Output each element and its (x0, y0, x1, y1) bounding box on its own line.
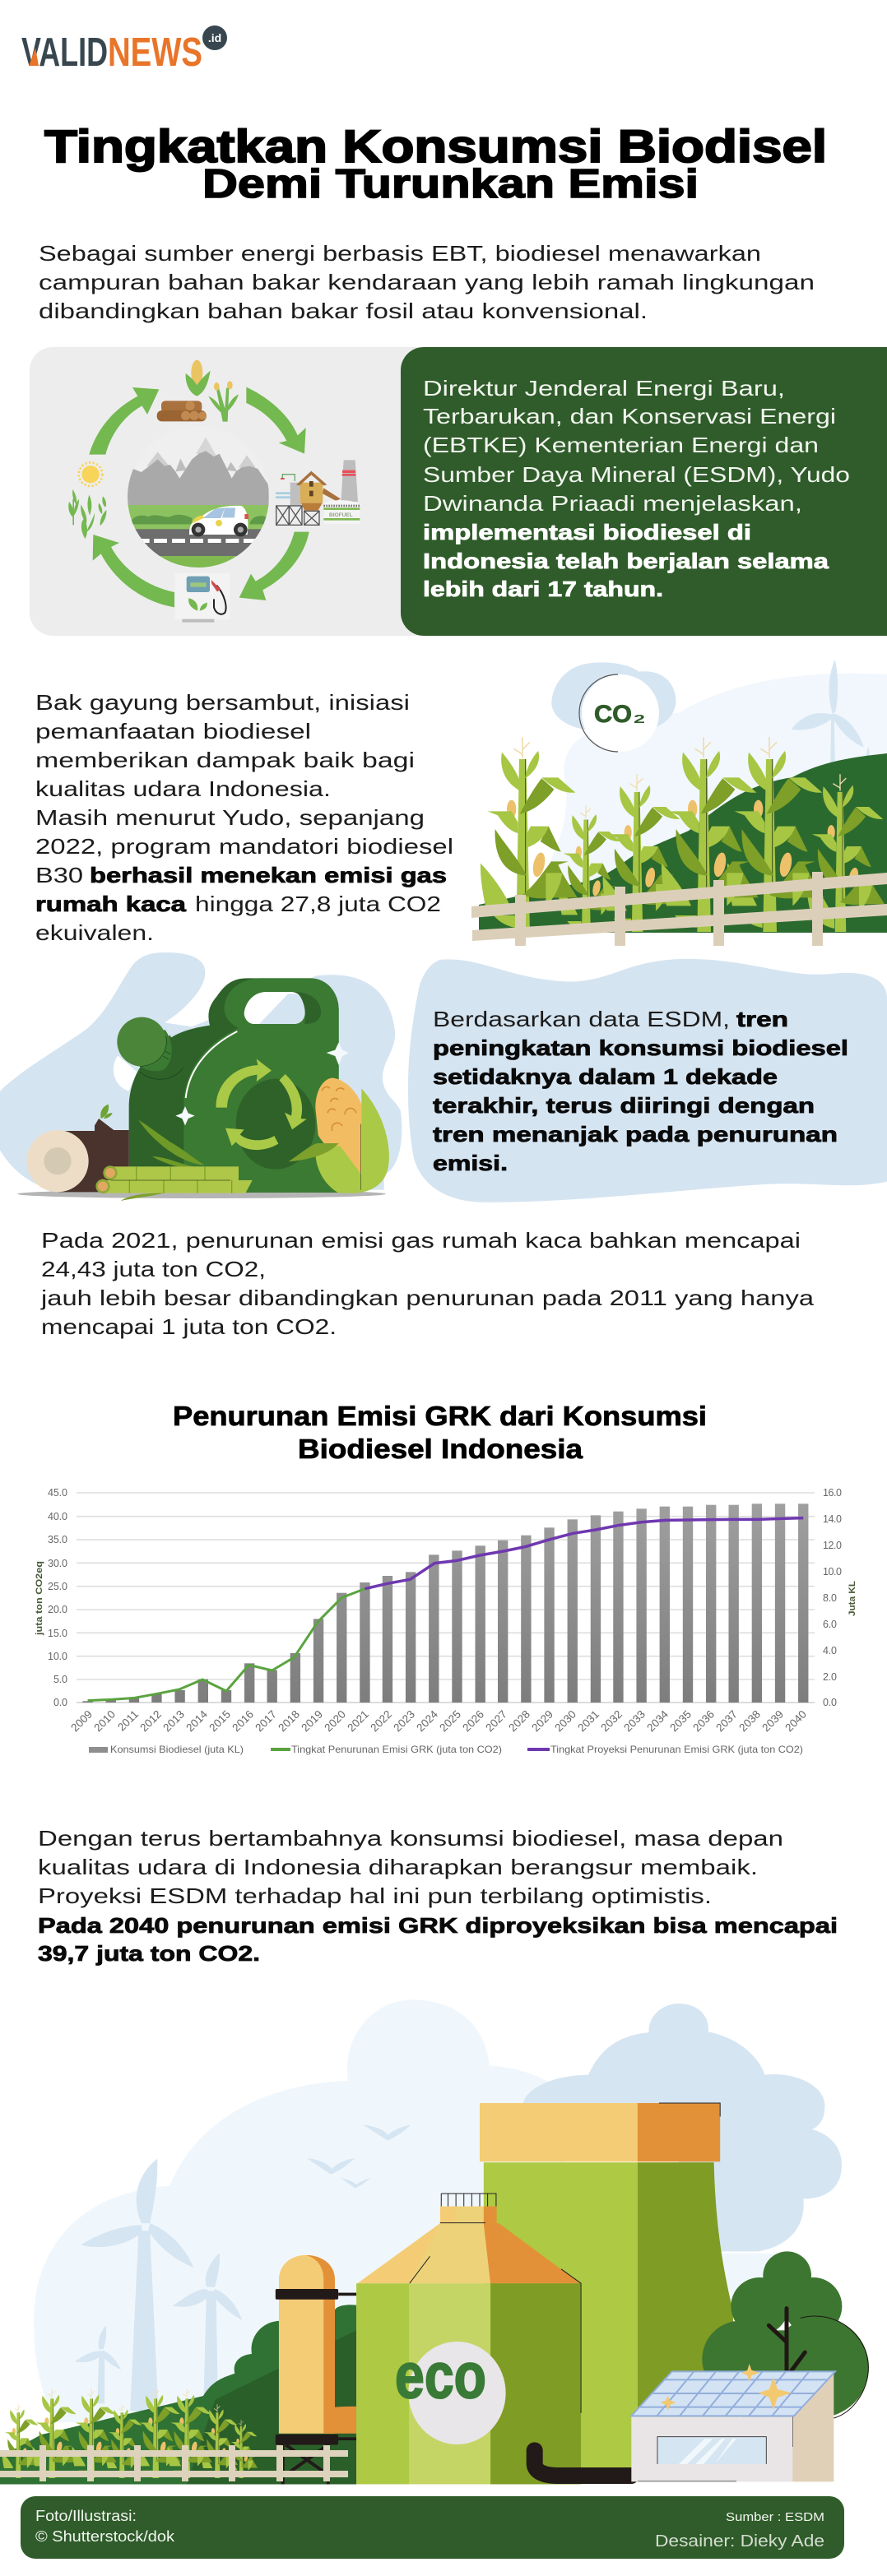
text block: B30 impact: B30 (35, 863, 83, 887)
left axis labels: 40.0 (48, 1511, 67, 1522)
icon: biofuel cycle diagram: BIOFUEL (329, 512, 353, 518)
right axis labels: 16.0 (823, 1487, 842, 1499)
x axis year labels: 2023 (391, 1708, 417, 1734)
panel: director statement: Terbarukan, dan Konservasi Energi (423, 404, 836, 429)
footer: © Shutterstock/dok (35, 2528, 175, 2545)
fence (471, 872, 887, 946)
x axis year labels: 2011 (115, 1708, 141, 1734)
x axis year labels: 2018 (276, 1708, 302, 1734)
illustration: corn field with CO2 (471, 660, 887, 946)
panel: ESDM data trend: Berdasarkan data ESDM, (433, 1007, 730, 1031)
tower (484, 2162, 638, 2475)
x axis year labels: 2036 (690, 1708, 717, 1734)
legend (89, 1744, 803, 1755)
axis titles (35, 1561, 857, 1636)
panel: director statement: (EBTKE) Kementerian Energi dan (423, 433, 819, 457)
title: Tingkatkan Konsumsi Biodisel (44, 120, 827, 172)
right axis labels: 8.0 (823, 1592, 837, 1604)
car (189, 506, 248, 536)
text block: 2021 emission figures: jauh lebih besar dibandingkan penurunan pada 2011 yang hanya (40, 1286, 815, 1310)
axis titles: Juta KL (848, 1581, 857, 1616)
panel: director statement (401, 347, 887, 636)
panel: ESDM data trend: tren menanjak pada penurunan (433, 1122, 838, 1147)
x axis year labels: 2035 (667, 1708, 694, 1734)
intro text: dibandingkan bahan bakar fosil atau konvensional. (39, 299, 648, 323)
text block: 2040 projection: 39,7 juta ton CO2. (38, 1941, 260, 1966)
text block: 2040 projection: Dengan terus bertambahnya konsumsi biodiesel, masa depan (38, 1826, 783, 1851)
panel: director statement: implementasi biodiesel di (423, 520, 751, 544)
title: Demi Turunkan Emisi (202, 162, 699, 206)
text block: B30 impact: kualitas udara Indonesia. (35, 776, 331, 801)
x axis year labels: 2033 (621, 1708, 648, 1734)
clouds, turbines, birds (0, 1999, 842, 2484)
logo: Validnews.id: NEWS (108, 30, 202, 75)
icon: CO2 badge: 2 (634, 712, 645, 726)
left axis labels: 25.0 (48, 1581, 67, 1592)
panel: director statement: Sumber Daya Mineral (ESDM), Yudo (423, 462, 850, 487)
logo: Validnews.id: .id (208, 31, 221, 44)
hill and left bushes (0, 2305, 356, 2484)
legend: Konsumsi Biodiesel (juta KL) (110, 1744, 244, 1755)
x axis year labels: 2016 (230, 1708, 256, 1734)
x axis year labels: 2014 (183, 1707, 210, 1734)
text block: 2021 emission figures: 24,43 juta ton CO2, (41, 1257, 266, 1281)
intro text: campuran bahan bakar kendaraan yang lebih ramah lingkungan (39, 270, 815, 294)
icon: CO2 badge (579, 674, 659, 752)
footer (21, 2496, 844, 2559)
text block: B30 impact: pemanfaatan biodiesel (35, 719, 311, 744)
x axis year labels: 2022 (368, 1708, 394, 1734)
icon: biofuel cycle diagram (68, 360, 360, 623)
x axis year labels: 2027 (483, 1708, 509, 1734)
chart title (173, 1401, 707, 1464)
x axis year labels: 2030 (552, 1708, 578, 1734)
x axis year labels: 2026 (460, 1708, 486, 1734)
left axis labels: 35.0 (48, 1534, 67, 1545)
chart title: Biodiesel Indonesia (298, 1434, 583, 1464)
illustration: green jerrycan (0, 952, 402, 1201)
panel: director statement: Indonesia telah berjalan selama (423, 549, 829, 573)
text block: 2040 projection: Pada 2040 penurunan emisi GRK diproyeksikan bisa mencapai (38, 1913, 838, 1938)
x axis year labels: 2021 (345, 1708, 371, 1734)
x axis year labels: 2013 (160, 1708, 187, 1734)
left axis labels: 10.0 (48, 1651, 67, 1662)
x axis year labels: 2010 (91, 1708, 118, 1734)
jug cap (138, 1035, 183, 1079)
panel: ESDM data trend: peningkatan konsumsi biodiesel (433, 1035, 848, 1060)
text block: 2021 emission figures: mencapai 1 juta ton CO2. (41, 1314, 337, 1339)
x axis year labels: 2012 (137, 1708, 164, 1734)
left axis labels: 30.0 (48, 1558, 67, 1569)
right axis labels: 4.0 (823, 1645, 837, 1656)
line: projected emission reduction (365, 1518, 803, 1589)
text block: B30 impact (35, 690, 453, 945)
legend: Tingkat Penurunan Emisi GRK (juta ton CO2) (291, 1744, 502, 1755)
footer: Foto/Illustrasi: (35, 2508, 137, 2524)
panel: biodiesel cycle (30, 347, 441, 636)
illustration: biodiesel plant (0, 1999, 869, 2484)
chart title: Penurunan Emisi GRK dari Konsumsi (173, 1401, 707, 1431)
left axis labels: 5.0 (53, 1674, 67, 1685)
text block: 2040 projection (38, 1826, 838, 1966)
right axis labels: 10.0 (823, 1566, 842, 1578)
x axis year labels: 2009 (68, 1708, 95, 1734)
text block: B30 impact: Masih menurut Yudo, sepanjang (35, 805, 425, 830)
right axis labels: 6.0 (823, 1619, 837, 1630)
x axis year labels: 2019 (299, 1708, 325, 1734)
text block: 2040 projection: kualitas udara di Indonesia diharapkan berangsur membaik. (38, 1855, 758, 1879)
right axis labels: 12.0 (823, 1540, 842, 1551)
x axis year labels: 2017 (253, 1708, 279, 1734)
left axis labels (48, 1487, 67, 1708)
x axis year labels: 2029 (529, 1708, 555, 1734)
factory (341, 460, 358, 502)
logo: Validnews.id: VALID (21, 30, 108, 75)
logo: Validnews.id (21, 25, 227, 75)
footer: Desainer: Dieky Ade (655, 2532, 824, 2551)
x axis year labels: 2024 (414, 1707, 440, 1734)
footer: Sumber : ESDM (726, 2510, 824, 2524)
right axis labels: 0.0 (823, 1697, 837, 1708)
x axis year labels: 2031 (575, 1708, 601, 1734)
x axis year labels: 2025 (437, 1708, 463, 1734)
text block: B30 impact: memberikan dampak baik bagi (35, 748, 415, 772)
small corn field and fence (0, 2388, 348, 2481)
left axis labels: 20.0 (48, 1604, 67, 1615)
intro text: Sebagai sumber energi berbasis EBT, biodiesel menawarkan (39, 241, 761, 266)
sugar cane (111, 1166, 239, 1180)
side tank (279, 2255, 335, 2434)
jug body (129, 978, 339, 1193)
x axis year labels: 2040 (783, 1708, 809, 1734)
chart: biodiesel consumption and emission reduction (35, 1487, 857, 1755)
bottle (356, 2283, 410, 2484)
intro text (39, 241, 815, 323)
left axis labels: 0.0 (53, 1697, 67, 1708)
x axis year labels: 2034 (644, 1707, 671, 1734)
x axis year labels: 2032 (598, 1708, 625, 1734)
panel: director statement: Dwinanda Priaadi menjelaskan, (423, 491, 802, 516)
panel: ESDM data trend: tren (736, 1007, 788, 1031)
text block: B30 impact: berhasil menekan emisi gas (90, 863, 447, 887)
sparkles (175, 1042, 349, 1125)
right axis labels: 14.0 (823, 1513, 842, 1525)
icon: CO2 badge: CO (594, 701, 632, 728)
plants (68, 489, 106, 539)
sun (81, 466, 100, 483)
text block: B30 impact: hingga 27,8 juta CO2 (195, 892, 441, 916)
right axis labels: 2.0 (823, 1671, 837, 1683)
x axis year labels: 2028 (506, 1708, 532, 1734)
x axis year labels (68, 1707, 809, 1734)
text block: 2040 projection: Proyeksi ESDM terhadap hal ini pun terbilang optimistis. (38, 1883, 712, 1908)
line: historic emission reduction (88, 1589, 365, 1701)
left axis labels: 15.0 (48, 1628, 67, 1639)
log (58, 1119, 129, 1192)
x axis year labels: 2039 (759, 1708, 786, 1734)
bars (82, 1503, 808, 1703)
fuel pump (175, 573, 230, 619)
text block: B30 impact: rumah kaca (35, 892, 187, 916)
panel: ESDM data trend: emisi. (433, 1151, 508, 1175)
text block: B30 impact: ekuivalen. (35, 920, 154, 945)
panel: director statement: lebih dari 17 tahun. (423, 577, 663, 601)
text block: 2021 emission figures (40, 1228, 815, 1339)
title (44, 120, 827, 206)
tree and solar house (631, 2251, 869, 2481)
text block: B30 impact: Bak gayung bersambut, inisiasi (35, 690, 410, 715)
corn (315, 1078, 361, 1174)
right axis labels (823, 1487, 842, 1708)
panel: ESDM data trend (408, 959, 887, 1202)
panel: ESDM data trend: setidaknya dalam 1 dekade (433, 1064, 778, 1089)
legend: Tingkat Proyeksi Penurunan Emisi GRK (juta ton CO2) (550, 1744, 803, 1755)
text block: B30 impact: 2022, program mandatori biodiesel (35, 834, 453, 859)
panel: ESDM data trend: terakhir, terus diiringi dengan (433, 1093, 815, 1118)
panel: director statement: Direktur Jenderal Energi Baru, (423, 376, 785, 401)
axis titles: juta ton CO2eq (35, 1561, 44, 1636)
icon: eco label: eco (395, 2339, 486, 2412)
x axis year labels: 2037 (713, 1708, 740, 1734)
x axis year labels: 2038 (736, 1708, 763, 1734)
pipe (535, 2450, 631, 2476)
left axis labels: 45.0 (48, 1487, 67, 1499)
x axis year labels: 2020 (322, 1708, 348, 1734)
recycle symbol (236, 1079, 315, 1170)
corn and logs (191, 360, 202, 386)
text block: 2021 emission figures: Pada 2021, penurunan emisi gas rumah kaca bahkan mencapai (41, 1228, 801, 1253)
x axis year labels: 2015 (207, 1708, 233, 1734)
